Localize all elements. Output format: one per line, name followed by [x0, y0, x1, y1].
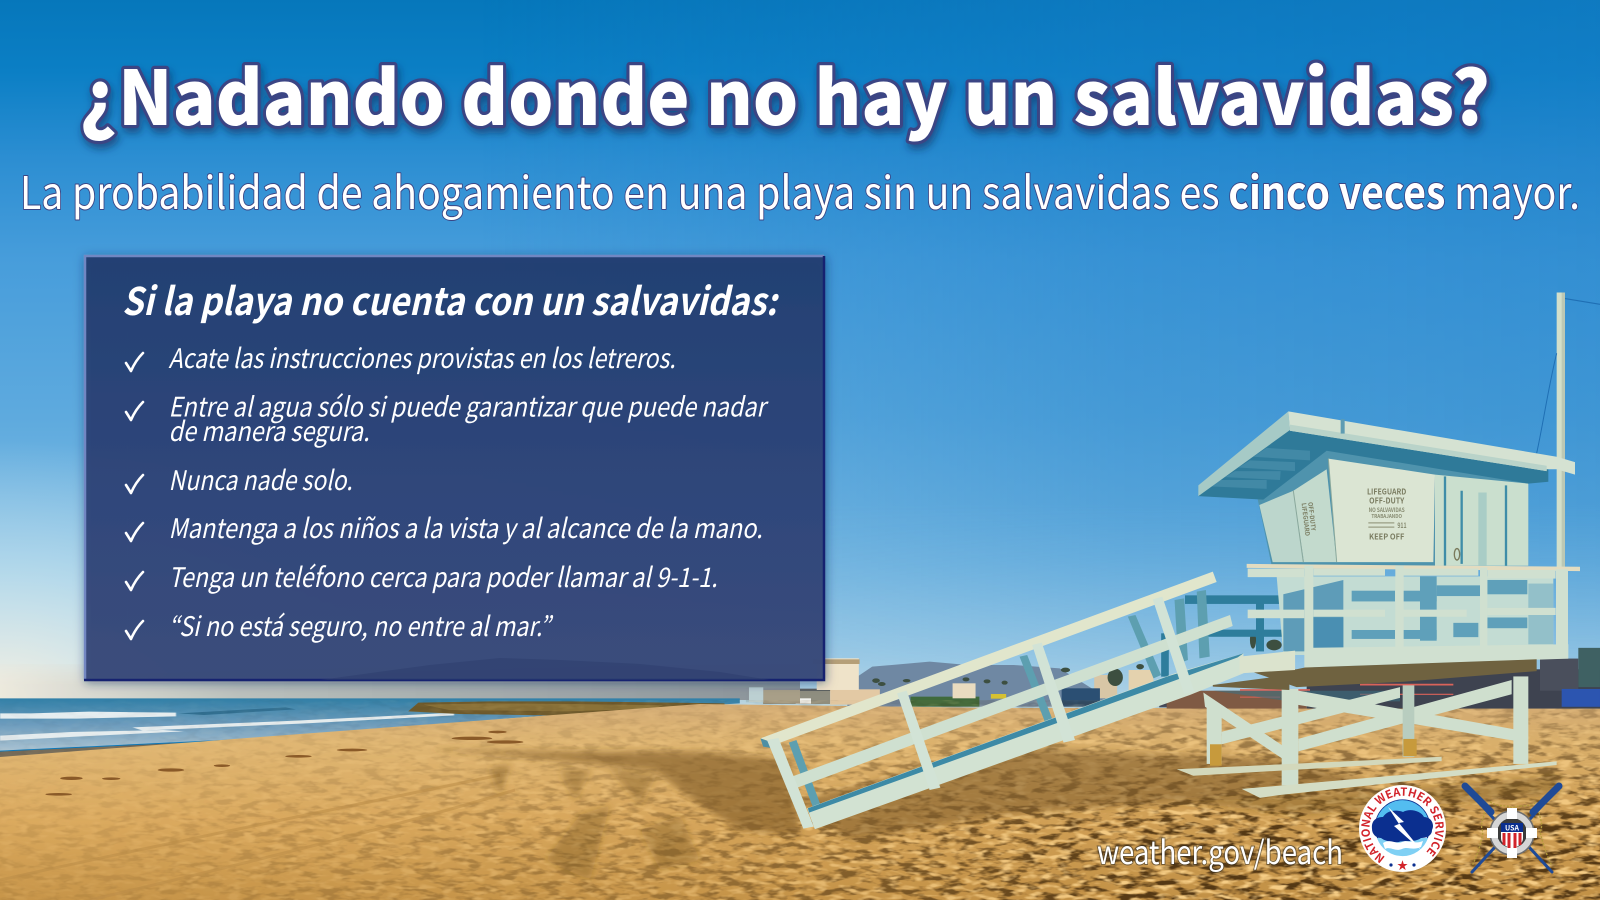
cabin walls: 911	[1397, 520, 1407, 530]
cabin walls: KEEP OFF	[1369, 531, 1405, 543]
advice list	[168, 337, 769, 644]
faint mountains through panel	[320, 658, 770, 680]
hand rail	[760, 572, 1217, 744]
front posts	[767, 597, 1194, 829]
lower stringer	[807, 653, 1243, 829]
advice list: Entre al agua sólo si puede garantizar que puede nadar	[168, 386, 769, 424]
cabin walls: TRABAJANDO	[1371, 513, 1402, 520]
cabin walls: LIFEGUARD	[1300, 502, 1313, 536]
signage: LIFEGUARD	[1367, 486, 1406, 497]
access ramp	[760, 572, 1295, 829]
underframe	[1177, 659, 1557, 798]
background: ocean	[0, 664, 800, 758]
title: ¿Nadando donde no hay un salvavidas?	[80, 38, 1490, 147]
pole and wires	[1537, 292, 1600, 567]
advice list: de manera segura.	[168, 410, 370, 449]
palms	[872, 631, 1282, 686]
deck railing	[1247, 564, 1580, 667]
advice list: Nunca nade solo.	[168, 459, 352, 498]
waves	[0, 712, 454, 741]
panel: lifeguard advice	[84, 255, 824, 680]
panel heading: Si la playa no cuenta con un salvavidas:	[122, 271, 779, 326]
background: distant hills and town	[0, 631, 1282, 707]
advice list: Mantenga a los niños a la vista y al alcance de la mano.	[168, 507, 762, 546]
lower wall	[1277, 576, 1553, 655]
logo: US Lifesaving Association: USA	[1505, 824, 1520, 834]
sand texture	[0, 700, 1600, 900]
cabin walls: OFF-DUTY	[1369, 495, 1405, 507]
landing	[1240, 651, 1295, 673]
cabin walls: NO SALVAVIDAS	[1369, 506, 1405, 514]
background buildings under deck	[1167, 648, 1600, 709]
logo: National Weather Service: ★	[1397, 857, 1408, 873]
background: sky	[0, 0, 1600, 720]
advice list: “Si no está seguro, no entre al mar.”	[168, 605, 554, 644]
roof	[1198, 411, 1575, 500]
back rail of landing	[1185, 595, 1284, 651]
mid rail	[792, 615, 1233, 788]
back posts	[789, 590, 1210, 807]
advice list: Tenga un teléfono cerca para poder llamar al 9-1-1.	[168, 556, 718, 595]
check marks	[126, 353, 143, 639]
lifeguard tower	[1167, 292, 1600, 798]
far buildings	[763, 690, 800, 703]
panel background	[84, 255, 824, 680]
seaweed	[45, 731, 523, 796]
cabin walls: OFF-DUTY	[1306, 501, 1319, 532]
logo: US Lifesaving Association	[1465, 786, 1559, 872]
town	[763, 690, 830, 704]
tracks	[0, 775, 515, 900]
website link: weather.gov/beach	[1097, 828, 1343, 874]
advice list: Acate las instrucciones provistas en los letreros.	[168, 337, 676, 376]
background: sand	[0, 700, 1600, 900]
cabin walls	[1257, 446, 1528, 566]
jetty rocks	[408, 701, 724, 716]
subtitle: La probabilidad de ahogamiento en una playa sin un salvavidas es cinco veces mayor.	[20, 157, 1580, 222]
stair and tower shadow on sand	[430, 748, 1560, 880]
logo: National Weather Service: NATIONAL WEATHER SERVICE	[1361, 787, 1444, 864]
